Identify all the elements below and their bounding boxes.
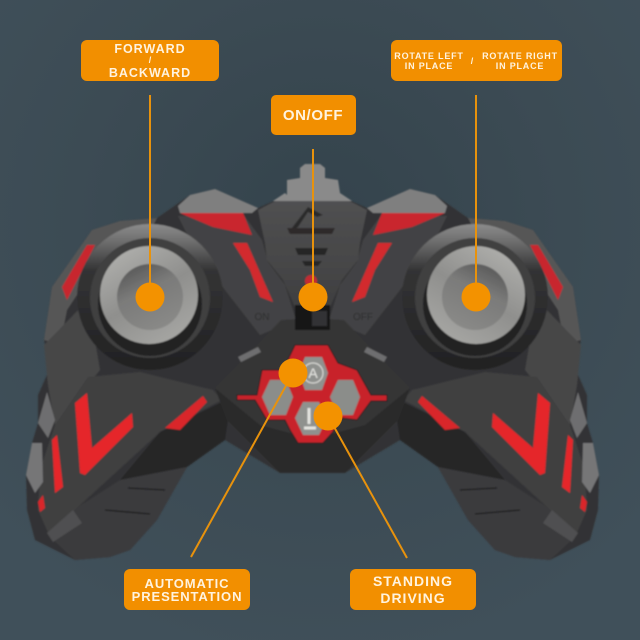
leader lines	[150, 95, 476, 558]
power switch labels: OFF	[353, 312, 373, 323]
label: forward / backward: FORWARD	[114, 42, 186, 56]
marker: automatic presentation button	[278, 358, 308, 388]
power switch labels	[254, 312, 373, 323]
label: rotate left / rotate right: ROTATE LEFT	[394, 51, 464, 61]
left half of controller	[26, 164, 316, 560]
label: rotate left / rotate right: ROTATE RIGHT	[482, 51, 558, 61]
label: on/off: ON/OFF	[283, 107, 343, 124]
label: rotate left / rotate right: IN PLACE	[496, 61, 544, 71]
marker: power switch	[298, 282, 328, 312]
button: right blank	[330, 380, 360, 415]
marker: left joystick	[136, 282, 164, 312]
label: forward / backward: /	[149, 55, 152, 65]
button: standing driving	[295, 402, 327, 435]
label: automatic presentation: PRESENTATION	[132, 589, 242, 604]
label: standing driving: DRIVING	[380, 590, 446, 606]
label: rotate left / rotate right: IN PLACE	[405, 61, 453, 71]
button: left blank	[262, 380, 293, 415]
right half of controller	[309, 164, 599, 560]
button: automatic presentation	[299, 357, 328, 390]
label: forward / backward	[81, 40, 219, 81]
label: automatic presentation: AUTOMATIC	[145, 576, 229, 591]
label: rotate left / rotate right: /	[471, 56, 474, 66]
marker: standing driving button	[314, 402, 342, 430]
label: forward / backward: BACKWARD	[109, 66, 191, 80]
label: automatic presentation	[124, 569, 250, 610]
red button plate	[237, 345, 387, 443]
label: standing driving: STANDING	[373, 573, 453, 589]
label: standing driving	[350, 569, 476, 610]
controller illustration	[26, 164, 599, 560]
label: rotate left / rotate right	[391, 40, 562, 81]
center hood	[258, 164, 367, 330]
button: automatic presentation: A	[308, 365, 318, 381]
marker: right joystick	[462, 282, 490, 312]
label: on/off	[271, 95, 356, 135]
power switch labels: ON	[254, 312, 270, 323]
